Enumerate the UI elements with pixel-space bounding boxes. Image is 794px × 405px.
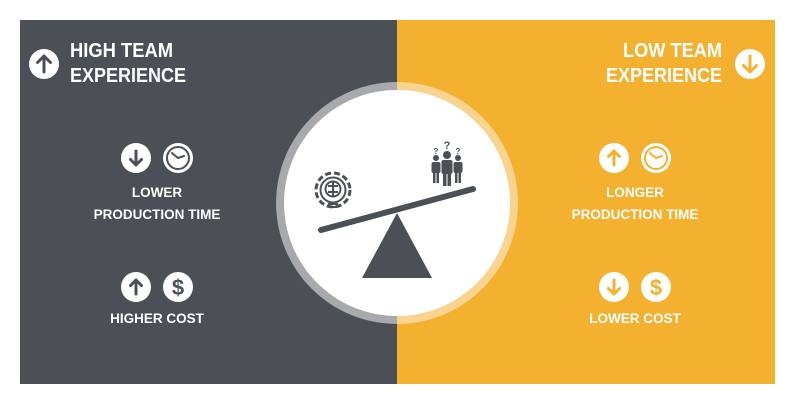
item: higher cost: $: [172, 275, 184, 300]
panel: low team experience: [397, 20, 775, 384]
heading: high team experience: HIGH TEAM: [70, 40, 173, 62]
item: lower production time: LOWER: [132, 185, 182, 200]
item: higher cost: [110, 272, 205, 326]
item: lower cost: [589, 272, 681, 326]
item: longer production time: PRODUCTION TIME: [572, 207, 698, 222]
icon: confused people: ?: [456, 147, 461, 156]
icon: gear lightbulb: [316, 173, 350, 207]
heading: high team experience: EXPERIENCE: [70, 65, 186, 87]
seesaw plank: [321, 189, 473, 230]
heading: low team experience: EXPERIENCE: [606, 65, 722, 87]
icon: confused people: ?: [444, 140, 451, 152]
item: lower production time: PRODUCTION TIME: [94, 207, 220, 222]
heading: high team experience: [29, 40, 186, 87]
item: lower cost: $: [650, 275, 662, 300]
item: higher cost: HIGHER COST: [110, 311, 205, 326]
icon: confused people: [432, 140, 462, 186]
item: lower cost: LOWER COST: [589, 311, 681, 326]
panel: high team experience: [20, 20, 397, 384]
item: longer production time: LONGER: [606, 185, 664, 200]
center circle: seesaw: [276, 82, 518, 324]
heading: low team experience: [606, 40, 765, 87]
icon: confused people: ?: [434, 147, 439, 156]
icon: triangle fulcrum: [362, 213, 432, 278]
item: lower production time: [94, 143, 220, 222]
heading: low team experience: LOW TEAM: [623, 40, 722, 62]
item: longer production time: [572, 143, 698, 222]
